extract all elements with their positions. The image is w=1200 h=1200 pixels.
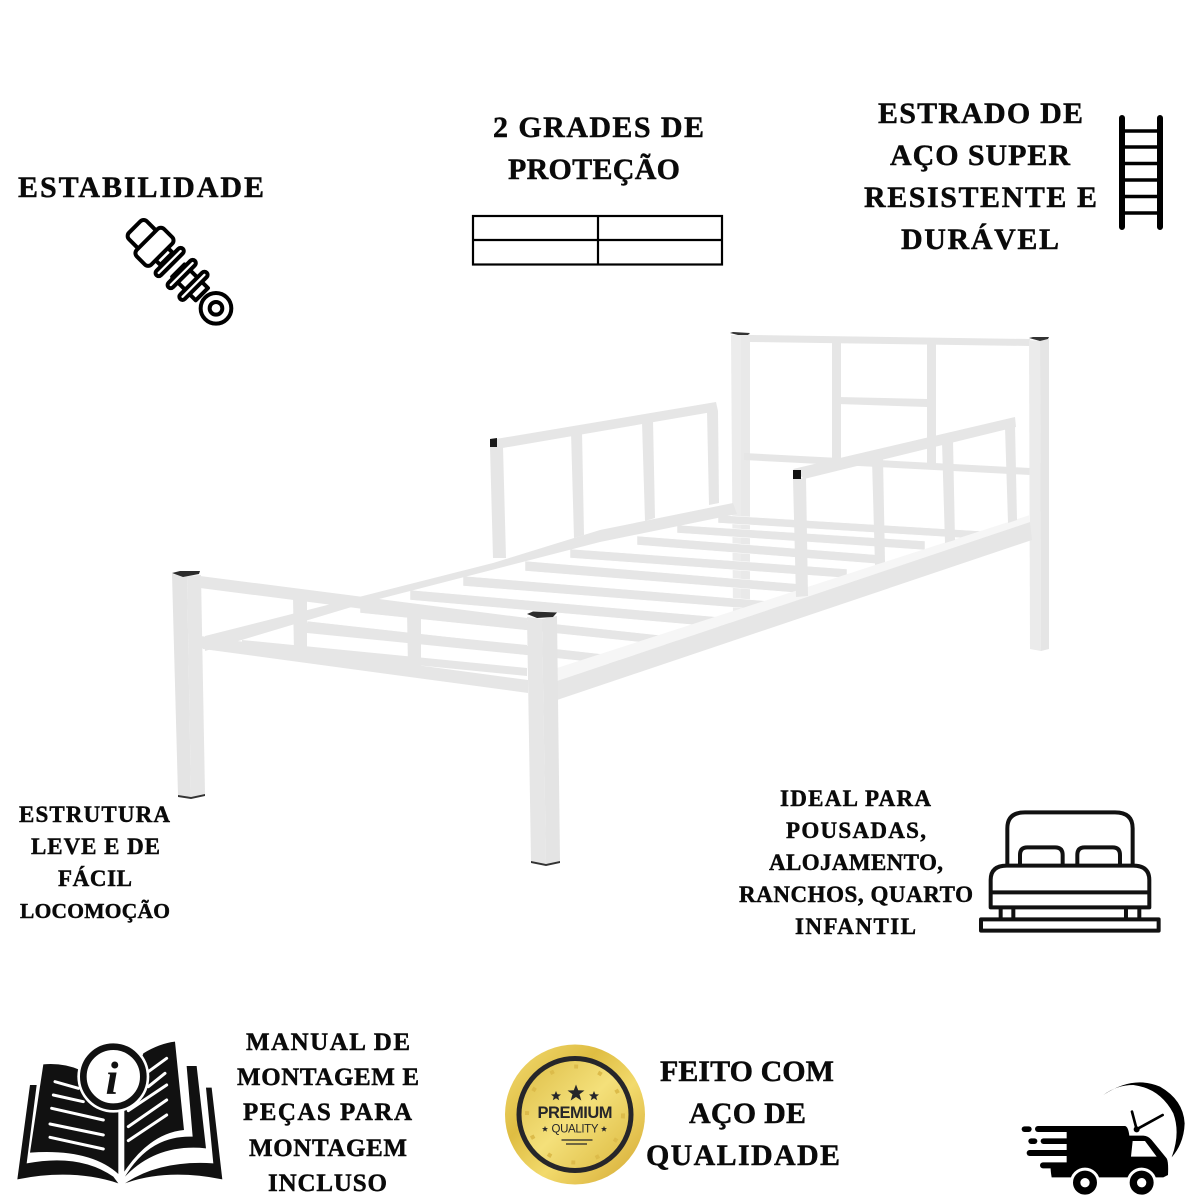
text: estrutura leve: LEVE E DE [31, 834, 160, 859]
icon: grid of two rails [473, 216, 722, 264]
text: feito com aço de qualidade [646, 1055, 840, 1172]
back side rail [205, 503, 737, 651]
icon: bed [981, 812, 1159, 931]
text: manual de montagem: MANUAL DE [246, 1029, 410, 1056]
heading: estabilidade: ESTABILIDADE [18, 171, 264, 204]
icon: ladder slats [1122, 118, 1160, 227]
icon: premium quality seal: PREMIUM [538, 1104, 612, 1122]
front protection guard [793, 417, 1017, 597]
heading: estrado de aço: AÇO SUPER [890, 139, 1070, 172]
bed frame photo [172, 332, 1049, 866]
icon: premium quality seal [505, 1044, 645, 1184]
text: manual de montagem: MONTAGEM [249, 1135, 407, 1162]
text: estrutura leve: ESTRUTURA [19, 802, 170, 827]
front right leg [527, 612, 560, 866]
text: manual de montagem: INCLUSO [268, 1170, 387, 1197]
heading: estrado de aço: RESISTENTE E [864, 181, 1097, 214]
text: feito com aço de qualidade: FEITO COM [660, 1055, 834, 1088]
rear protection guard [490, 402, 719, 558]
seal stars [542, 1084, 607, 1132]
heading: 2 grades de proteção [493, 111, 704, 186]
text: estrutura leve [19, 802, 170, 923]
icon: fast delivery truck with clock [1022, 1082, 1185, 1198]
text: feito com aço de qualidade: QUALIDADE [646, 1139, 840, 1172]
icon: premium quality seal: QUALITY [552, 1124, 599, 1136]
text: manual de montagem: PEÇAS PARA [243, 1099, 412, 1126]
heading: estrado de aço [864, 97, 1097, 256]
text: ideal para: INFANTIL [795, 914, 916, 939]
mattress support slats [307, 515, 980, 665]
foot board [172, 571, 528, 799]
heading: estrado de aço: ESTRADO DE [878, 97, 1083, 130]
text: manual de montagem [237, 1029, 419, 1197]
heading: estrado de aço: DURÁVEL [901, 223, 1059, 256]
heading: 2 grades de proteção: 2 GRADES DE [493, 111, 704, 144]
text: ideal para [739, 786, 973, 939]
heading: 2 grades de proteção: PROTEÇÃO [508, 153, 680, 186]
text: ideal para: RANCHOS, QUARTO [739, 882, 973, 907]
headboard [730, 332, 1049, 651]
text: manual de montagem: MONTAGEM E [237, 1064, 419, 1091]
icon: shock absorber [121, 213, 240, 333]
text: estrutura leve: LOCOMOÇÃO [20, 899, 170, 923]
text: estrutura leve: FÁCIL [58, 866, 132, 891]
text: feito com aço de qualidade: AÇO DE [689, 1097, 806, 1130]
text: ideal para: IDEAL PARA [780, 786, 931, 811]
icon: manual book with info badge: i [106, 1053, 119, 1105]
front side rail [557, 515, 1032, 700]
text: ideal para: POUSADAS, [786, 818, 926, 843]
icon: manual book with info badge [17, 1041, 222, 1183]
text: ideal para: ALOJAMENTO, [769, 850, 943, 875]
